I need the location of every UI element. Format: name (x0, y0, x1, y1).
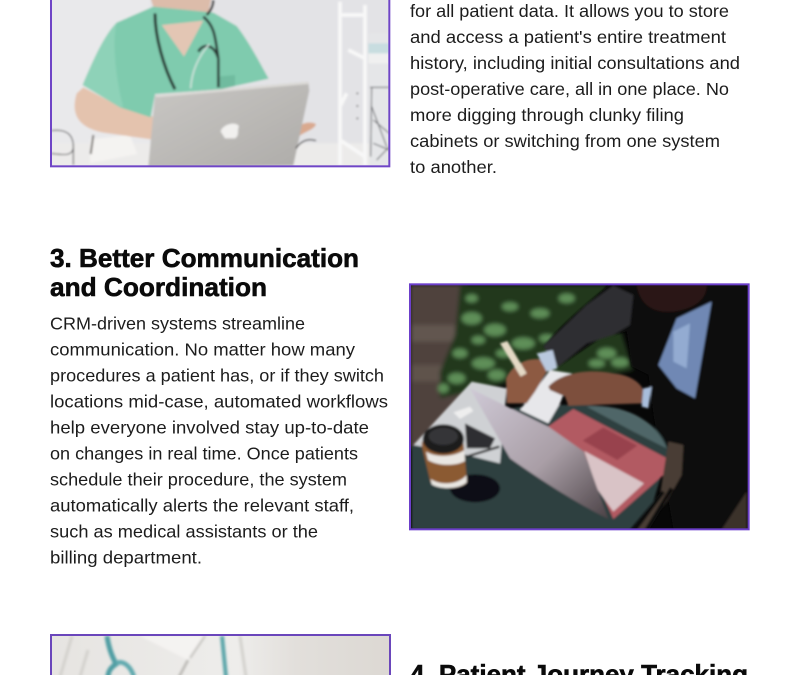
body text: CRM data paragraph: for all patient data. It allows you to store (410, 1, 729, 21)
body text: better communication paragraph: procedures a patient has, or if they switch (50, 366, 384, 386)
photo: doctor's white coat and stethoscope (50, 634, 391, 675)
body text: better communication paragraph: help everyone involved stay up-to-date (50, 418, 369, 438)
body text: better communication paragraph: on changes in real time. Once patients (50, 444, 358, 464)
heading: 3. Better Communication and Coordination: and Coordination (50, 272, 267, 302)
body text: CRM data paragraph: to another. (410, 157, 497, 177)
body text: better communication paragraph: communication. No matter how many (50, 340, 355, 360)
heading: 3. Better Communication and Coordination (50, 243, 359, 302)
photo: nurse using a laptop (50, 0, 390, 168)
body text: better communication paragraph: billing department. (50, 548, 202, 568)
body text: CRM data paragraph: and access a patient's entire treatment (410, 27, 726, 47)
body text: CRM data paragraph: cabinets or switching from one system (410, 131, 720, 151)
body text: CRM data paragraph: more digging through clunky filing (410, 105, 684, 125)
body text: better communication paragraph: automatically alerts the relevant staff, (50, 496, 354, 516)
body text: CRM data paragraph: post-operative care, all in one place. No (410, 79, 729, 99)
body text: better communication paragraph (50, 314, 388, 568)
body text: better communication paragraph: CRM-driven systems streamline (50, 314, 305, 334)
heading: 3. Better Communication and Coordination: 3. Better Communication (50, 243, 359, 273)
body text: CRM data paragraph: history, including initial consultations and (410, 53, 740, 73)
body text: CRM data paragraph (410, 1, 740, 177)
body text: better communication paragraph: locations mid-case, automated workflows (50, 392, 388, 412)
body text: better communication paragraph: such as medical assistants or the (50, 522, 318, 542)
body text: better communication paragraph: schedule their procedure, the system (50, 470, 347, 490)
photo: person writing beside a red laptop (410, 284, 750, 530)
